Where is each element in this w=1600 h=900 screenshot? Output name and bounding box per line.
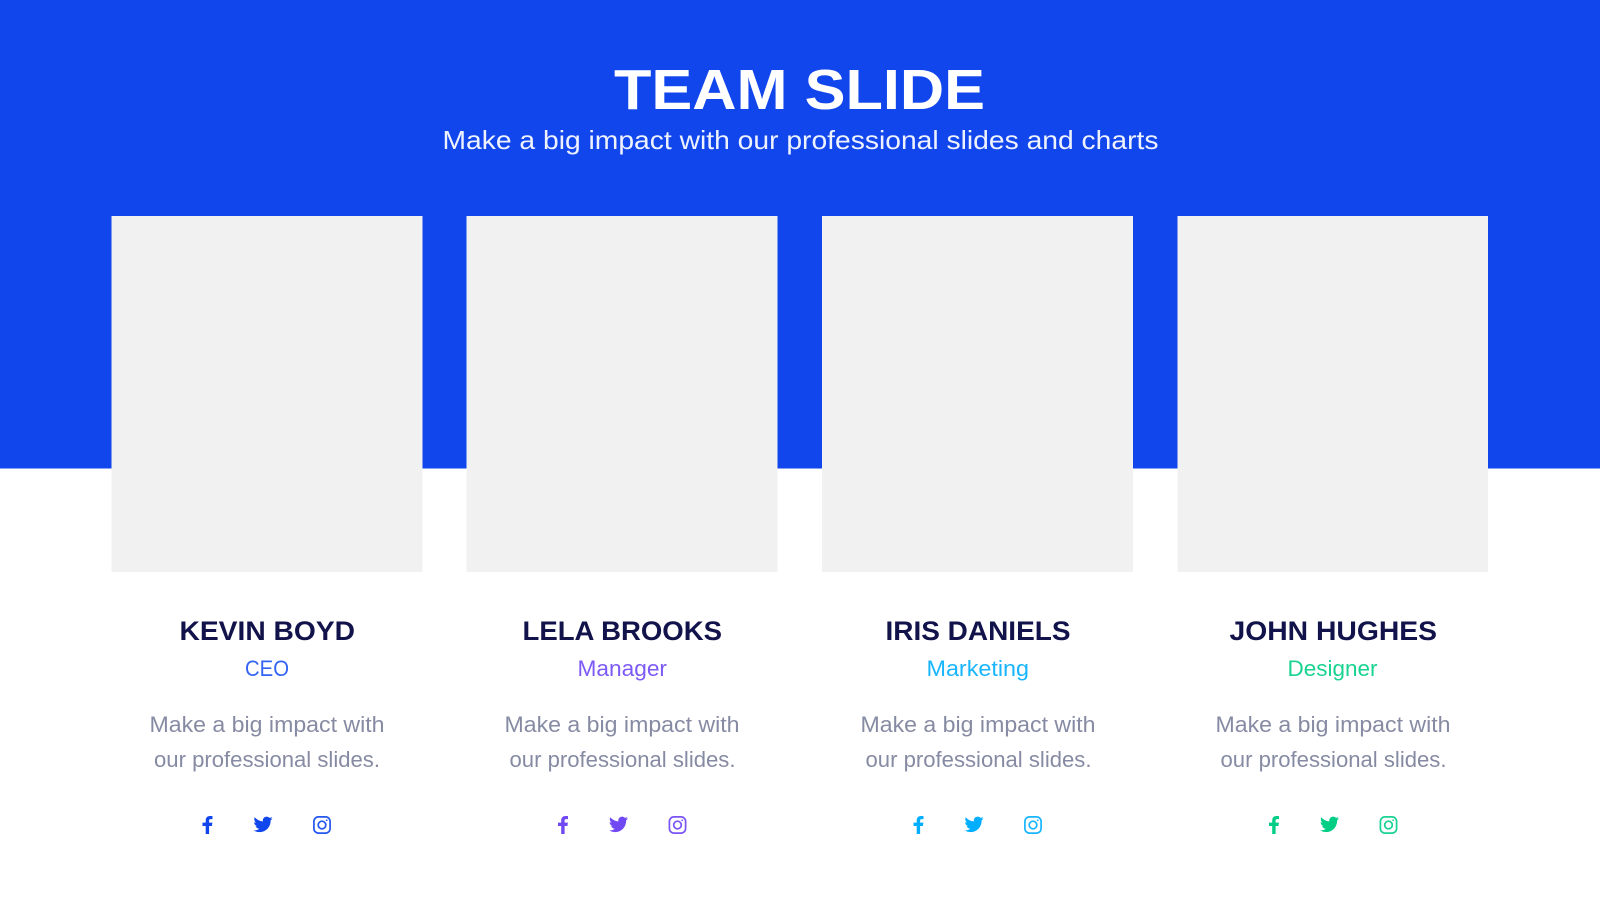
subtitle: Make a big impact with our professional slides and charts xyxy=(442,125,1158,155)
photo placeholder: Lela Brooks xyxy=(466,216,778,572)
panel: Iris Daniels xyxy=(822,216,1133,834)
title: TEAM SLIDE xyxy=(614,58,985,122)
blue header background xyxy=(0,0,1600,468)
panel: John Hughes xyxy=(1178,216,1488,834)
description: John Hughes: Make a big impact with xyxy=(1216,712,1450,737)
social icons: John Hughes xyxy=(1269,816,1397,834)
description: John Hughes: our professional slides. xyxy=(1220,747,1446,772)
photo placeholder: Iris Daniels xyxy=(822,216,1133,572)
description: Iris Daniels xyxy=(860,712,1096,772)
description: John Hughes xyxy=(1216,712,1450,772)
role: Manager: Manager xyxy=(578,656,667,681)
role: Designer: Designer xyxy=(1288,656,1378,681)
social icons: Lela Brooks xyxy=(558,816,686,834)
panel: Kevin Boyd xyxy=(112,216,422,834)
name: Iris Daniels: IRIS DANIELS xyxy=(886,616,1070,646)
name: John Hughes: JOHN HUGHES xyxy=(1230,616,1437,646)
description: Kevin Boyd: Make a big impact with xyxy=(150,712,384,737)
description: Iris Daniels: our professional slides. xyxy=(866,747,1092,772)
panel: Lela Brooks xyxy=(466,216,778,834)
description: Iris Daniels: Make a big impact with xyxy=(860,712,1096,737)
photo placeholder: Kevin Boyd xyxy=(112,216,422,572)
description: Kevin Boyd xyxy=(150,712,384,772)
description: Kevin Boyd: our professional slides. xyxy=(154,747,380,772)
description: Lela Brooks xyxy=(504,712,740,772)
name: Kevin Boyd: KEVIN BOYD xyxy=(180,616,355,646)
description: Lela Brooks: Make a big impact with xyxy=(504,712,740,737)
name: Lela Brooks: LELA BROOKS xyxy=(522,616,722,646)
photo placeholder: John Hughes xyxy=(1178,216,1488,572)
social icons: Kevin Boyd xyxy=(202,816,330,834)
role: CEO: CEO xyxy=(245,656,289,681)
description: Lela Brooks: our professional slides. xyxy=(510,747,736,772)
role: Marketing: Marketing xyxy=(926,656,1029,681)
social icons: Iris Daniels xyxy=(914,816,1041,834)
